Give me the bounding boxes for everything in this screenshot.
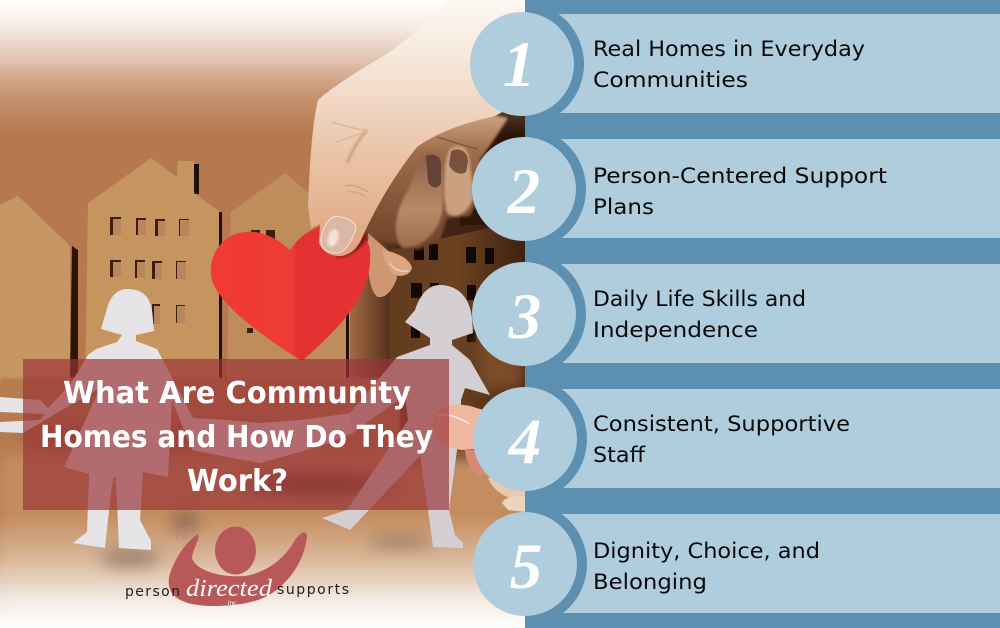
logo: inc: inc. [228, 600, 238, 607]
list item 2 [472, 137, 1000, 241]
list item 4: Consistent, Supportive [593, 412, 850, 437]
hand: rear fingers [355, 110, 508, 297]
photo: paper houses and hand [0, 0, 530, 628]
logo: supports: supports [277, 582, 349, 598]
back of hand in shadow [355, 110, 508, 250]
logo: arms [169, 533, 307, 606]
floor [0, 377, 522, 579]
list item 5 [473, 512, 1000, 616]
thumb shadow on heart [335, 232, 368, 258]
dark background at right [350, 112, 525, 466]
top fade [0, 0, 526, 135]
paper house right [227, 173, 350, 385]
paper figure left [0, 289, 353, 550]
list item 5: Dignity, Choice, and [593, 539, 820, 564]
list item 4: 4 [507, 406, 541, 478]
hand: palm and thumb [308, 0, 525, 256]
title text: Work? [187, 464, 288, 499]
paper house middle [85, 158, 222, 385]
list item 1: Real Homes in Everyday [593, 37, 865, 62]
list item 1: 1 [503, 29, 535, 101]
ring finger [444, 146, 474, 216]
paper house left [0, 196, 78, 385]
heart [211, 225, 370, 361]
lower hand fingers [433, 405, 525, 512]
shadows of figures [100, 510, 432, 567]
lower finger [367, 233, 397, 297]
logo: motion marks [177, 527, 191, 540]
list item 2: Plans [593, 195, 654, 220]
list item 1 [470, 12, 1000, 116]
logo: directed: directed [186, 576, 273, 602]
list item 2: 2 [507, 156, 540, 228]
list item 1: Communities [593, 68, 748, 93]
thumb knuckle creases [345, 185, 368, 197]
list item 3: Independence [593, 318, 758, 343]
list item 3: Daily Life Skills and [593, 287, 806, 312]
list item 3 [472, 262, 1000, 366]
list item 2: Person-Centered Support [593, 164, 887, 189]
palm crease [347, 130, 367, 163]
paper figure right [322, 285, 490, 548]
title text: What Are Community [63, 376, 411, 411]
list item 5: 5 [510, 531, 542, 603]
thumbnail [321, 216, 356, 253]
list item 3: 3 [508, 281, 541, 353]
list item 5: Belonging [593, 570, 707, 595]
list item 4 [473, 387, 1000, 491]
title band [23, 359, 449, 510]
little finger [382, 250, 412, 276]
logo [125, 526, 349, 607]
logo: head [215, 526, 256, 574]
middle finger [396, 154, 444, 247]
title text: Homes and How Do They [40, 420, 433, 455]
bottom fade [0, 515, 526, 628]
list panel background [525, 0, 1000, 628]
dark house behind hand [390, 220, 525, 455]
logo: person: person [125, 584, 180, 600]
list item 4: Staff [593, 443, 646, 468]
